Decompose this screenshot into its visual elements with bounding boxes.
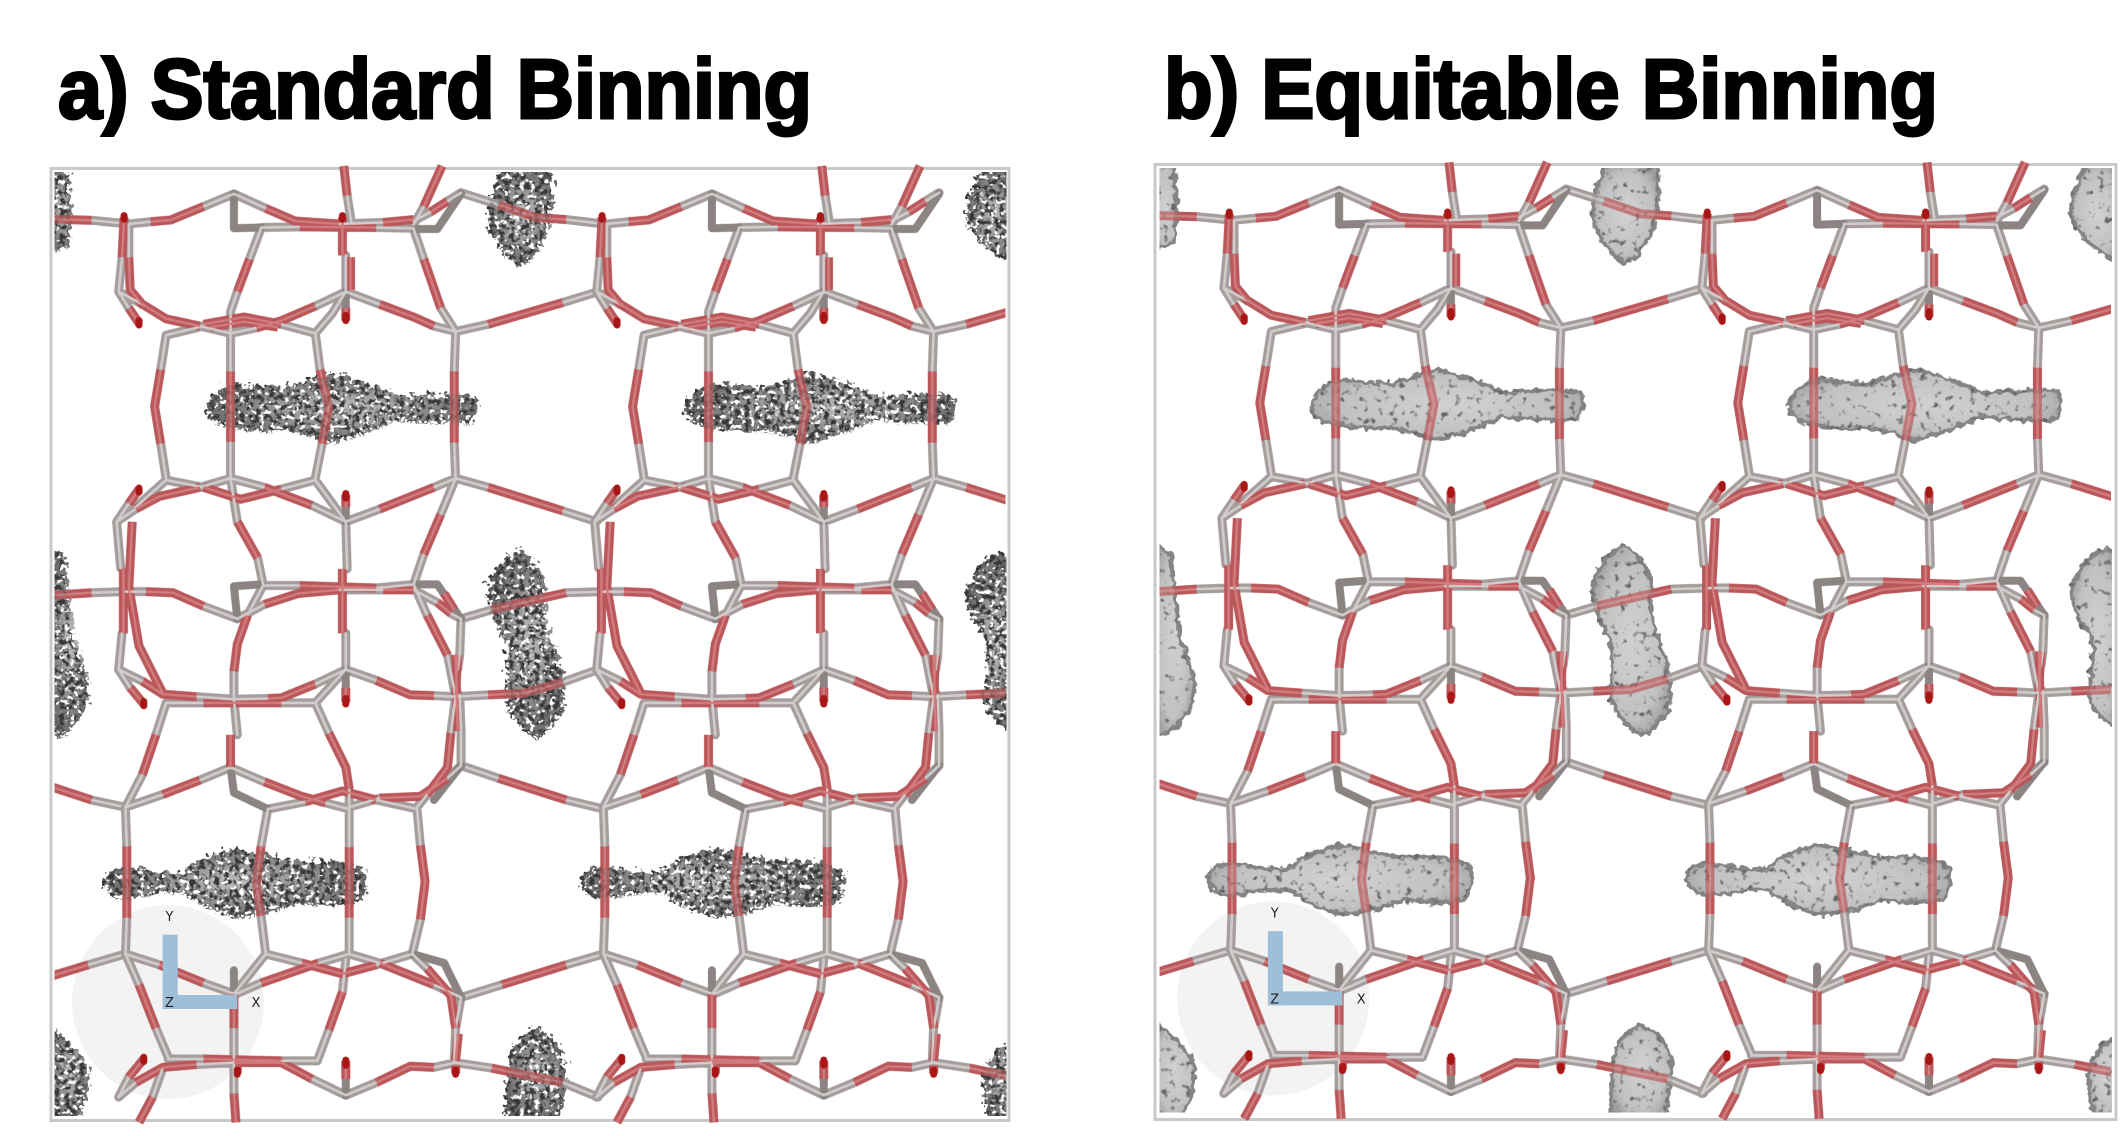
panel b: equitable binning structure <box>1153 162 2126 1119</box>
axis triad a: X <box>252 996 261 1011</box>
panel a: standard binning structure <box>47 166 1076 1122</box>
axis triad a: Y <box>165 910 174 925</box>
axis triad b <box>1268 906 1366 1007</box>
axis triad a: Z <box>165 996 174 1011</box>
axis triad b: Y <box>1270 906 1279 921</box>
axis triad a <box>163 910 261 1011</box>
axis triad b: X <box>1357 992 1366 1007</box>
density overlay b <box>1153 163 2122 1119</box>
heading a: Standard Binning: a) Standard Binning <box>58 42 812 136</box>
density overlay a <box>47 167 1017 1122</box>
framework sticks a <box>53 166 1076 1122</box>
heading b: Equitable Binning: b) Equitable Binning <box>1164 42 1938 136</box>
axis backdrop circle b <box>1177 901 1369 1095</box>
density blobs b <box>1153 163 2122 1119</box>
panel b frame <box>1155 164 2116 1120</box>
axis backdrop circle a <box>72 905 264 1099</box>
axis triad b: Z <box>1270 992 1279 1007</box>
framework sticks b <box>1158 162 2126 1119</box>
density blobs a <box>47 167 1017 1122</box>
